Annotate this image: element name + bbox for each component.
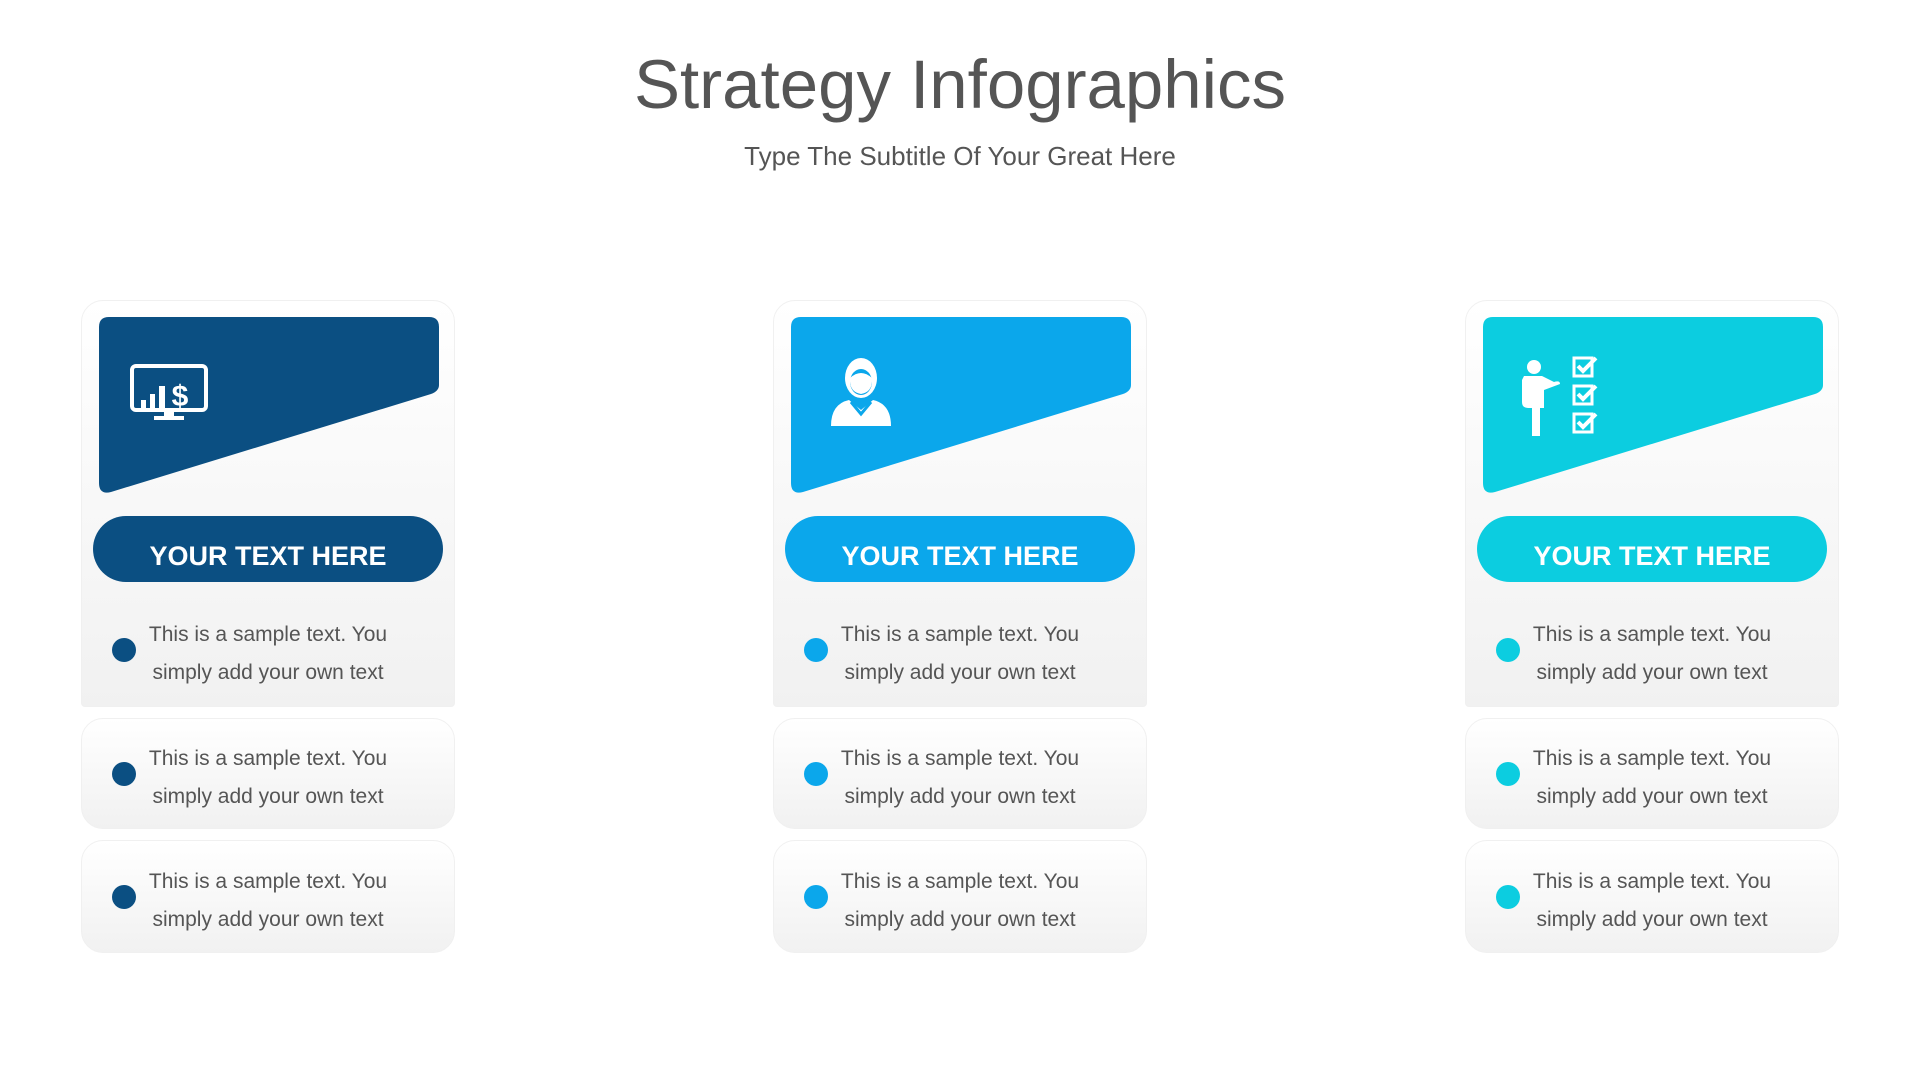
title: Strategy Infographics xyxy=(634,46,1286,123)
column 1 xyxy=(81,300,455,953)
pill heading 2 xyxy=(785,516,1135,582)
panel: box 1b: This is a sample text. You simply add your own text xyxy=(149,747,387,808)
panel: box 2b xyxy=(773,718,1147,829)
panel: box 2b: This is a sample text. You simply add your own text xyxy=(841,747,1079,808)
pill heading 3 xyxy=(1477,516,1827,582)
panel: box 2c xyxy=(773,840,1147,953)
panel: box 3b xyxy=(1465,718,1839,829)
pill heading 1: YOUR TEXT HERE xyxy=(149,541,387,571)
panel: box 2c: This is a sample text. You simply add your own text xyxy=(841,870,1079,931)
panel: top card 1 xyxy=(81,300,455,707)
banner shape 2 xyxy=(791,317,1131,493)
pill heading 2: YOUR TEXT HERE xyxy=(841,541,1079,571)
icon: monitor with chart and dollar: $ xyxy=(172,380,189,413)
icon: monitor with chart and dollar xyxy=(130,364,208,420)
column 3 xyxy=(1465,300,1839,953)
panel: box 1c xyxy=(81,840,455,953)
pill heading 1 xyxy=(93,516,443,582)
panel: box 3b: This is a sample text. You simply add your own text xyxy=(1533,747,1771,808)
pill heading 3: YOUR TEXT HERE xyxy=(1533,541,1771,571)
panel: top card 2 xyxy=(773,300,1147,707)
panel: box 1c: This is a sample text. You simply add your own text xyxy=(149,870,387,931)
bullet 1a: This is a sample text. You simply add your own text xyxy=(149,623,387,684)
column 2 xyxy=(773,300,1147,953)
bullet 3a: This is a sample text. You simply add your own text xyxy=(1533,623,1771,684)
panel: box 1b xyxy=(81,718,455,829)
icon: woman xyxy=(831,358,891,426)
banner shape 3 xyxy=(1483,317,1823,493)
icon: presenter with checklist xyxy=(1522,356,1598,436)
panel: box 3c: This is a sample text. You simply add your own text xyxy=(1533,870,1771,931)
subtitle: Type The Subtitle Of Your Great Here xyxy=(744,141,1176,171)
bullet 2a: This is a sample text. You simply add your own text xyxy=(841,623,1079,684)
panel: top card 3 xyxy=(1465,300,1839,707)
banner shape 1 xyxy=(99,317,439,493)
panel: box 3c xyxy=(1465,840,1839,953)
